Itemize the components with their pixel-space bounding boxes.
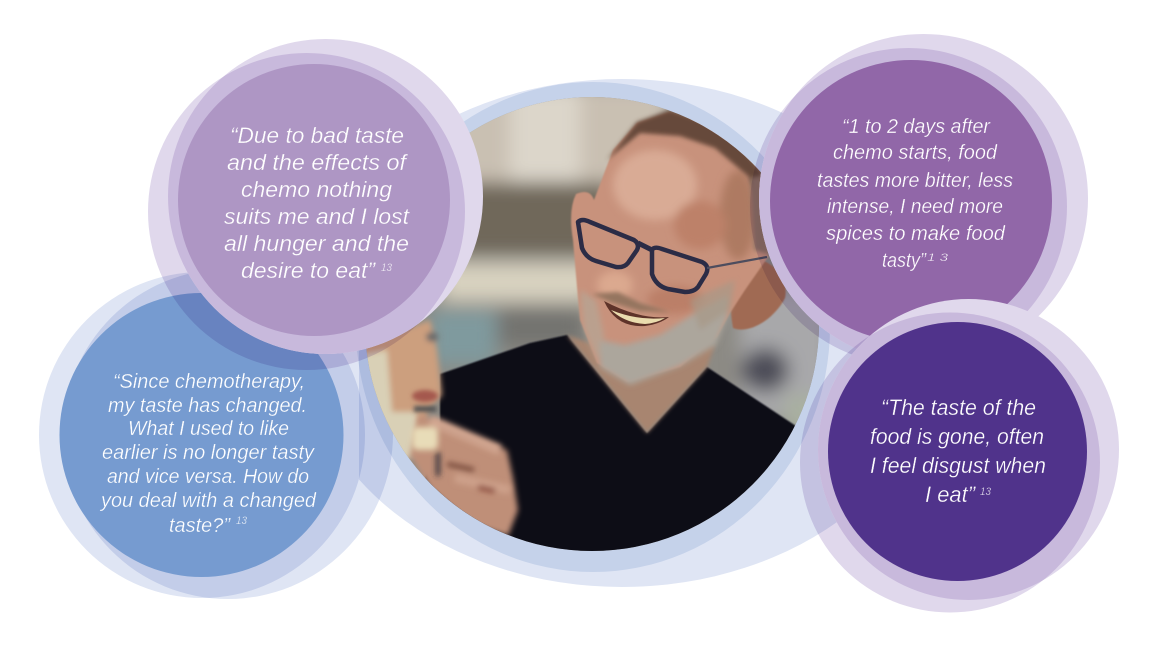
lips [412, 390, 438, 412]
quote text: blue circle: my taste has changed. [108, 394, 307, 417]
quote text: blue circle: 13 [236, 515, 248, 527]
quote text: “1 to 2 days after [842, 116, 991, 138]
quote text: blue circle: and vice versa. How do [107, 465, 309, 488]
quote text: tasty” [882, 250, 927, 272]
quote text: spices to make food [826, 223, 1006, 245]
head [571, 112, 768, 382]
quote text [817, 116, 1013, 272]
quote text: 13 [381, 262, 393, 274]
beard [580, 280, 735, 385]
quote text: food is gone, often [870, 424, 1044, 449]
quote text: blue circle [99, 370, 317, 537]
quote text: desire to eat” [241, 258, 377, 283]
panel: central outer ring [359, 79, 856, 587]
quote text: all hunger and the [224, 231, 409, 256]
right ear [730, 259, 786, 330]
quote text: 13 [980, 486, 992, 498]
panel: dark purple quote circle, bottom right [800, 299, 1119, 612]
quote text: blue circle: you deal with a changed [99, 489, 317, 512]
blurred person in foreground [360, 320, 442, 470]
panel: purple quote circle, top left [148, 39, 483, 370]
photo: smiling man tasting food [360, 85, 830, 560]
dark purple quote disc [828, 322, 1087, 581]
quote text: blue circle: taste?” [169, 514, 231, 537]
quote text: and the effects of [227, 150, 409, 175]
quote text: intense, I need more [827, 196, 1003, 218]
panel: blue quote circle, bottom left [39, 269, 393, 599]
moustache [592, 292, 670, 312]
man's neck [567, 335, 715, 433]
panel: central inner ring [356, 82, 830, 572]
quote text: chemo nothing [241, 177, 392, 202]
quote text: suits me and I lost [224, 204, 411, 229]
quote text: chemo starts, food [833, 142, 998, 164]
quote text: blue circle: What I used to like [128, 417, 289, 440]
glasses [578, 220, 767, 292]
blue quote disc [60, 293, 344, 577]
man's shirt [424, 334, 796, 551]
quote text: I feel disgust when [870, 453, 1046, 478]
hair [608, 109, 761, 186]
mouth and teeth [604, 301, 669, 326]
quote text: blue circle: earlier is no longer tasty [102, 441, 316, 464]
violet quote disc [770, 60, 1052, 342]
quote text: 1 3 [927, 252, 949, 264]
quote text: blue circle: “Since chemotherapy, [113, 370, 305, 393]
lilac quote disc [178, 64, 450, 336]
quote text [870, 395, 1046, 507]
quote text: “The taste of the [881, 395, 1036, 420]
quote text [224, 123, 411, 283]
quote text: I eat” [925, 482, 977, 507]
quote text: “Due to bad taste [230, 123, 404, 148]
quote text: tastes more bitter, less [817, 170, 1013, 192]
panel: purple quote circle, top right [750, 34, 1088, 365]
hand [410, 414, 518, 536]
